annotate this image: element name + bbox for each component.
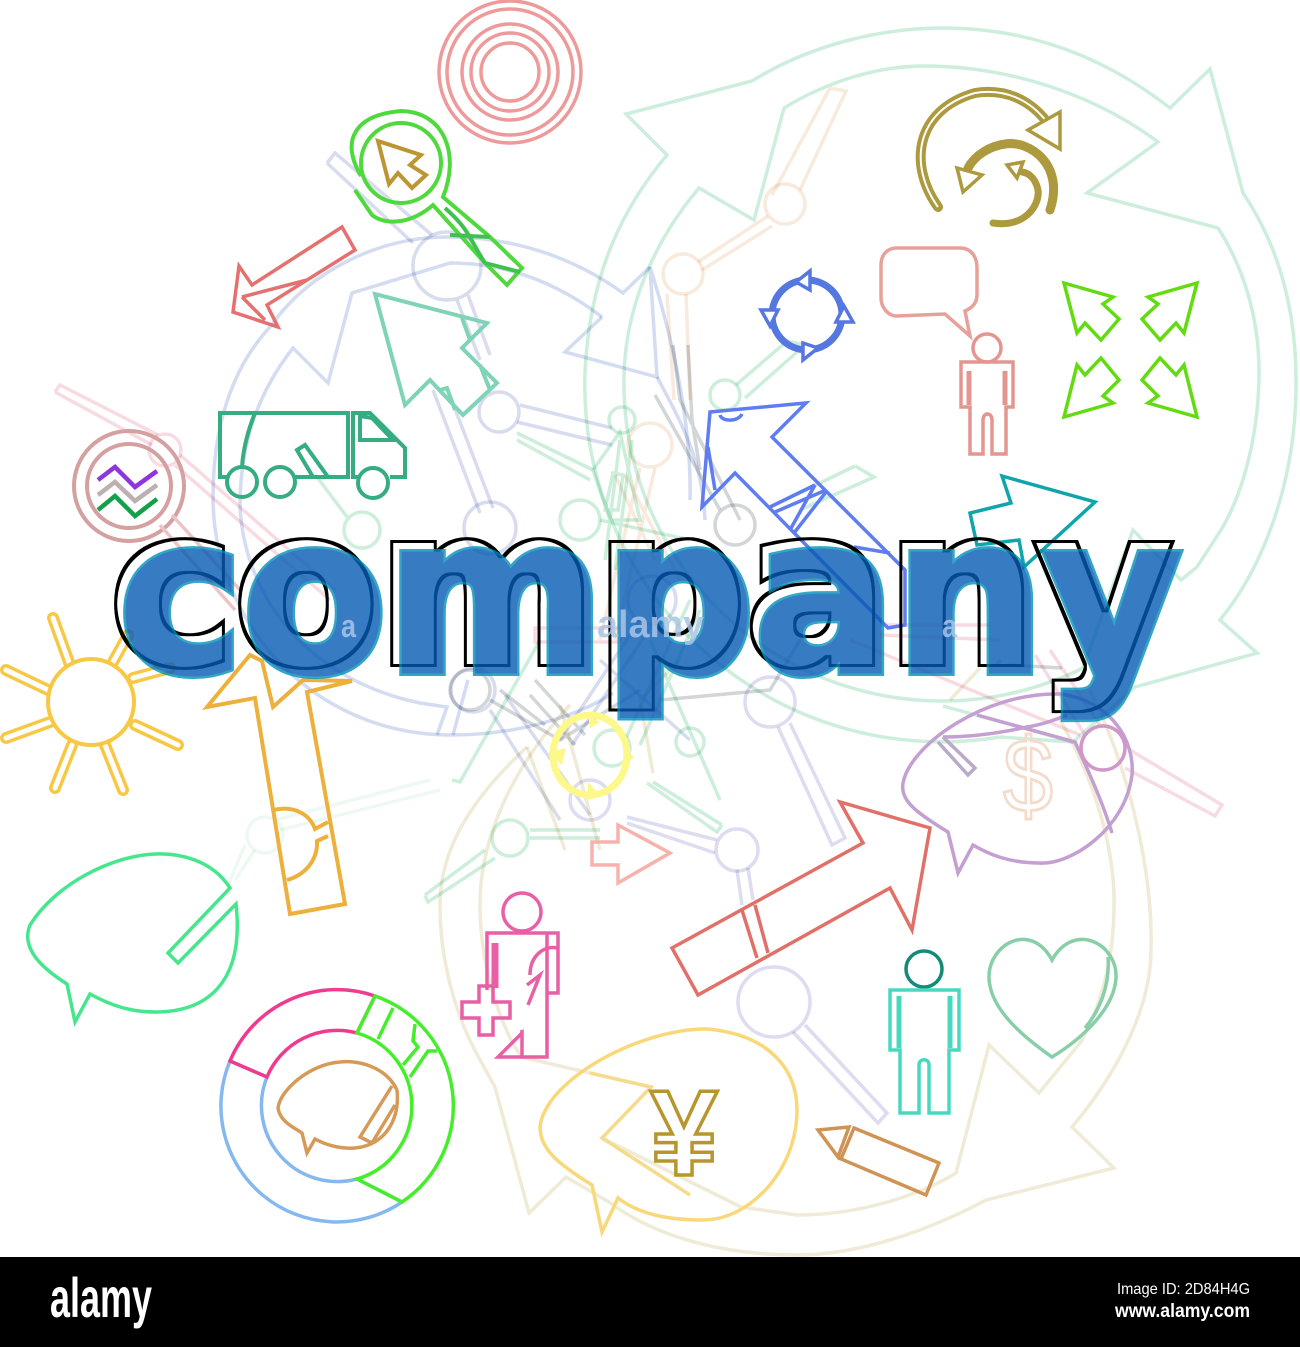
- icon: concentric target: [439, 1, 581, 143]
- footer image id: Image ID: 2D84H4G: [1117, 1281, 1250, 1298]
- faint circular arrows: centre left: [213, 237, 705, 735]
- icon: pink person with plus: [462, 893, 558, 1057]
- icon: purple speech bubble with dollar: [903, 694, 1132, 873]
- icon: red arrow down-left: [233, 227, 355, 327]
- footer website: www.alamy.com: [1114, 1301, 1250, 1322]
- faint network icons: [55, 88, 1222, 1123]
- icon: pink speech bubble: [881, 248, 977, 336]
- footer bar: [0, 1257, 1300, 1347]
- title blue fill layers: company: [119, 473, 1181, 722]
- icon: teal cursor arrow: [375, 294, 497, 415]
- icon: yellow circular arrows: [548, 715, 634, 800]
- network: blue left: [327, 153, 690, 820]
- icon: tan circular arrows: [921, 92, 1060, 224]
- title black outline layer: company: [110, 464, 1172, 713]
- icon: sun: [6, 618, 178, 790]
- icon: four green arrows: [1064, 283, 1197, 417]
- faint circular arrows: top right: [585, 28, 1296, 742]
- network: grey centre: [450, 345, 1062, 745]
- icon: pencil: [818, 1127, 939, 1195]
- icon: green magnifier with cursor: [352, 111, 522, 285]
- faint circular arrows: bottom: [440, 660, 1151, 1255]
- icon: pink person: [961, 334, 1013, 454]
- watermark text: alamy: [597, 604, 704, 646]
- watermark text: [341, 604, 957, 646]
- icon: orange up arrow: [207, 655, 352, 914]
- network: pink diagonal: [55, 385, 1222, 816]
- icon: delivery truck: [220, 413, 405, 498]
- title: company: [110, 464, 1181, 722]
- title blue fill layers: company: [119, 473, 1181, 722]
- icon: blue large arrow: [702, 403, 905, 628]
- icon: yen symbol: ¥: [650, 1065, 718, 1201]
- icon: green heart: [989, 939, 1116, 1057]
- network: purple lower centre: [570, 677, 887, 1123]
- icon: teal right arrow: [970, 476, 1095, 567]
- network: green centre: [317, 341, 874, 902]
- icon: yellow speech bubble with yen: [540, 1029, 797, 1232]
- icon: red large arrow up-right: [672, 802, 930, 995]
- network: orange top: [600, 88, 846, 640]
- icon: pink magnifier with chevrons: [74, 431, 240, 610]
- icon: green speech bubble: [28, 854, 237, 1022]
- icon: blue circular arrows: [761, 271, 853, 360]
- icon: pink small arrow: [592, 825, 670, 883]
- icon: donut chart with speech bubble: [221, 990, 453, 1222]
- watermark text: a: [341, 608, 356, 644]
- icon: dollar symbol: $: [1003, 718, 1053, 835]
- footer logo: alamy: alamy: [50, 1266, 152, 1329]
- watermark text: a: [942, 608, 957, 644]
- icon: teal person: [890, 951, 959, 1113]
- network: faint left stem: [228, 780, 440, 885]
